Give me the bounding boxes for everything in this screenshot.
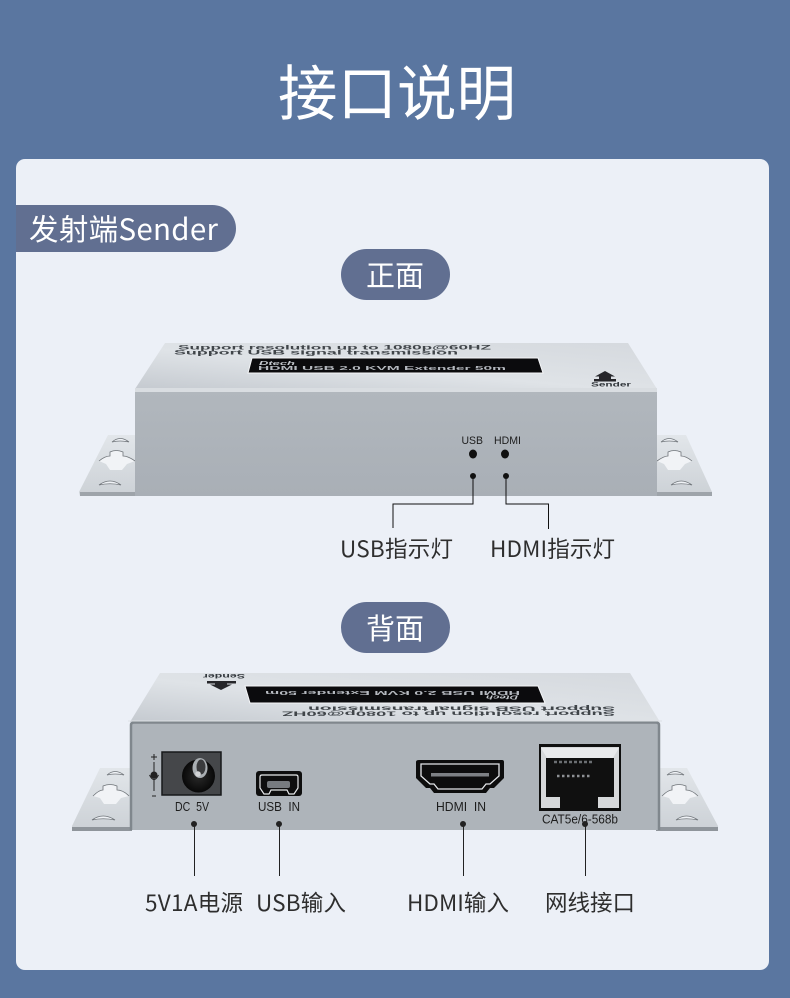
HDMI IN text: HDMI IN <box>436 800 486 814</box>
callout: HDMI input line <box>460 821 466 876</box>
LED labels: HDMI <box>494 435 521 447</box>
section tag: sender: 发射端Sender <box>29 207 219 249</box>
top face print, upside down: Support USB signal transmission <box>308 704 615 712</box>
top face print, upside down: Support resolution up to 1080p@60HZ <box>282 710 615 716</box>
top face print, upside down <box>282 704 615 716</box>
RJ45 network port <box>539 744 621 811</box>
top face print <box>174 344 491 356</box>
pill heading: front: 正面 <box>366 253 424 295</box>
callout: network line <box>582 821 588 876</box>
USB LED <box>469 450 477 458</box>
left mounting flange <box>72 768 132 831</box>
top face <box>130 673 660 722</box>
power polarity symbol <box>150 754 158 796</box>
black product label, upside down: Dtech <box>486 694 518 700</box>
label: USB input: USB输入 <box>256 886 346 918</box>
HDMI LED <box>501 450 509 458</box>
callout: USB input line <box>276 821 282 876</box>
top face <box>135 343 657 389</box>
front face <box>135 391 657 496</box>
USB IN text: USB IN <box>258 800 300 814</box>
label: HDMI indicator: HDMI指示灯 <box>490 532 615 564</box>
label: network port: 网线接口 <box>545 886 635 918</box>
black product label: HDMI USB 2.0 KVM Extender 50m <box>258 366 506 372</box>
DC power jack <box>162 752 221 795</box>
sender arrow mark, upside down <box>202 672 245 690</box>
top face print: Support USB signal transmission <box>174 350 458 356</box>
HDMI port <box>416 760 504 793</box>
mini USB port <box>256 771 302 796</box>
label: USB indicator: USB指示灯 <box>340 532 453 564</box>
sender arrow mark: Sender <box>591 382 632 388</box>
DC 5V text: DC 5V <box>175 800 210 814</box>
black product label, upside down: HDMI USB 2.0 KVM Extender 50m <box>265 689 520 695</box>
sender arrow mark, upside down: Sender <box>202 672 245 678</box>
CAT5e text: CAT5e/6-568b <box>542 812 618 826</box>
pill heading: back: 背面 <box>366 606 424 648</box>
callout: USB indicator line <box>393 473 476 528</box>
LED labels <box>462 435 521 447</box>
right mounting flange <box>656 435 712 496</box>
black product label <box>248 358 543 373</box>
right mounting flange <box>656 768 718 831</box>
back view device <box>72 672 718 831</box>
panel: main card <box>16 159 769 970</box>
sender arrow mark <box>591 371 632 388</box>
LED labels: USB <box>462 435 483 447</box>
pill heading: back <box>341 602 450 653</box>
left mounting flange <box>79 435 136 496</box>
top face print: Support resolution up to 1080p@60HZ <box>178 344 491 352</box>
callout: HDMI indicator line <box>503 473 548 529</box>
title: 接口说明 <box>278 46 516 133</box>
label: HDMI input: HDMI输入 <box>407 886 509 918</box>
front view device <box>79 343 712 496</box>
black product label: Dtech <box>259 361 295 367</box>
pill heading: front <box>341 249 450 300</box>
black product label, upside down <box>245 686 545 703</box>
callout: power line <box>191 821 197 876</box>
label: power: 5V1A电源 <box>145 886 243 918</box>
back face <box>128 721 662 830</box>
